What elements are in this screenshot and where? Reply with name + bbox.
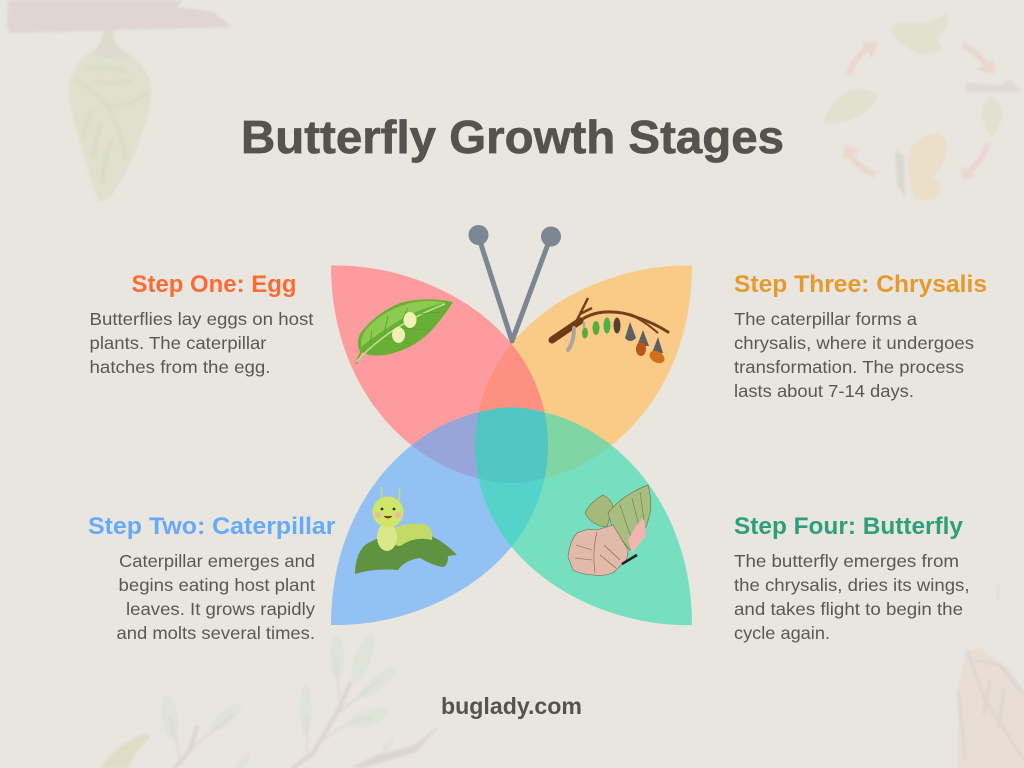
decoration: hanging chrysalis top left	[7, 0, 232, 201]
panel: step three	[734, 271, 987, 401]
title: Butterfly Growth Stages	[241, 111, 784, 163]
text block	[734, 309, 974, 401]
text block: and molts several times.	[116, 623, 315, 643]
text block: lasts about 7-14 days.	[734, 381, 914, 401]
text block: plants. The caterpillar	[90, 333, 267, 353]
heading: Step Three: Chrysalis	[734, 271, 987, 298]
icon: chrysalis branch	[552, 298, 668, 366]
antennae	[468, 225, 561, 341]
text block: The caterpillar forms a	[734, 309, 917, 329]
text block: leaves. It grows rapidly	[126, 599, 315, 619]
text block: Butterflies lay eggs on host	[90, 309, 314, 329]
text block	[734, 551, 970, 643]
icon: butterfly	[568, 485, 651, 576]
text block: the chrysalis, dries its wings,	[734, 575, 970, 595]
text block: transformation. The process	[734, 357, 964, 377]
text block: hatches from the egg.	[90, 357, 270, 377]
icon: leaf with eggs	[355, 299, 453, 364]
decoration: life cycle top right	[823, 13, 1022, 200]
butterfly diagram	[320, 225, 704, 630]
panel: step four	[734, 513, 970, 643]
decoration: butterfly wing bottom right	[958, 585, 1024, 768]
heading: Step Two: Caterpillar	[88, 513, 336, 540]
text block: cycle again.	[734, 623, 830, 643]
text block: begins eating host plant	[118, 575, 315, 595]
heading: Step One: Egg	[132, 271, 296, 298]
wing: blue	[331, 408, 548, 625]
footer: website: buglady.com	[441, 693, 582, 719]
text block: and takes flight to begin the	[734, 599, 963, 619]
text block: The butterfly emerges from	[734, 551, 959, 571]
text block	[90, 309, 314, 377]
text block: chrysalis, where it undergoes	[734, 333, 974, 353]
text block	[116, 551, 315, 643]
wing: red	[331, 266, 548, 483]
icon: caterpillar on leaf	[355, 487, 457, 574]
panel: step two	[88, 513, 336, 643]
decoration: branches bottom left	[100, 631, 440, 768]
wing: green	[475, 408, 692, 625]
heading: Step Four: Butterfly	[734, 513, 963, 540]
panel: step one	[90, 271, 314, 377]
wing: orange	[475, 266, 692, 483]
text block: Caterpillar emerges and	[119, 551, 315, 571]
